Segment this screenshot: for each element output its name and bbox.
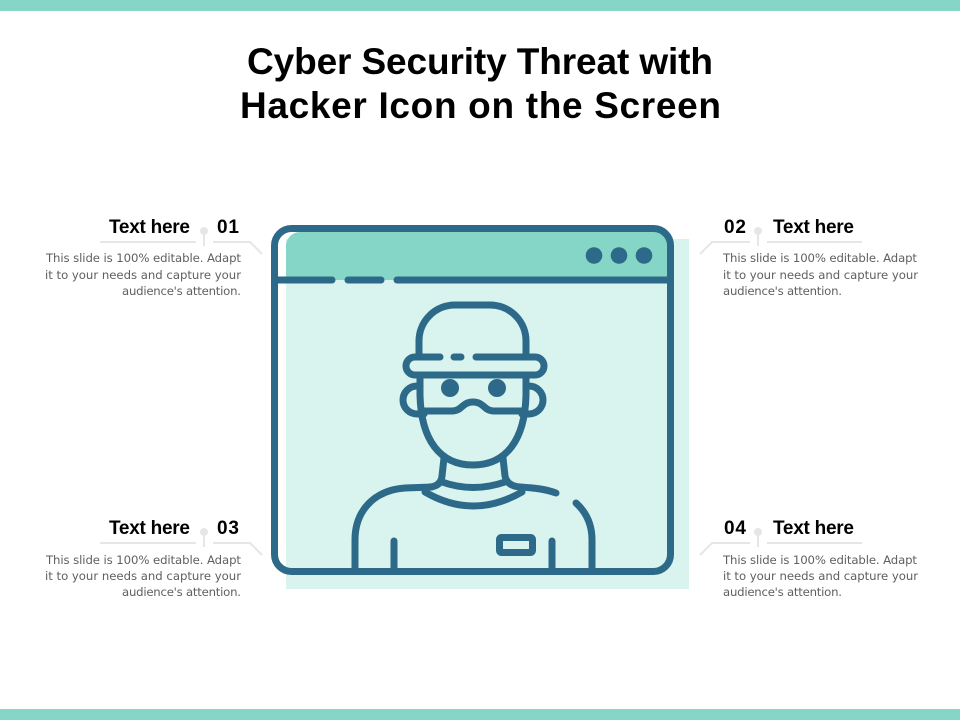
callout 03: audience's attention. — [122, 585, 241, 599]
callout 02: audience's attention. — [723, 284, 842, 298]
bottom bar — [0, 709, 960, 720]
callout 01: Text here — [109, 217, 190, 238]
callout 03: 03 — [217, 518, 239, 539]
icon: browser window with hacker — [274, 228, 670, 572]
window frame — [274, 228, 670, 572]
hacker figure — [355, 305, 592, 570]
callout 03: This slide is 100% editable. Adapt — [45, 553, 241, 567]
shoulders — [355, 487, 592, 570]
callout 04 — [700, 518, 918, 599]
callout 04: 04 — [724, 518, 746, 539]
callout 03: it to your needs and capture your — [45, 569, 241, 583]
title — [240, 41, 721, 126]
face — [420, 376, 526, 465]
goggles — [424, 402, 523, 411]
callout 01: This slide is 100% editable. Adapt — [45, 251, 241, 265]
callout 04: This slide is 100% editable. Adapt — [722, 553, 917, 567]
callout 01 — [45, 217, 262, 298]
neck — [430, 458, 520, 487]
callout 02: it to your needs and capture your — [723, 268, 918, 282]
arms — [394, 541, 552, 570]
title bar divider — [275, 276, 670, 284]
callout 03 — [45, 518, 262, 599]
title: Cyber Security Threat with — [247, 41, 713, 82]
eyes — [441, 379, 459, 397]
callout 04: Text here — [773, 518, 854, 539]
badge — [500, 538, 532, 552]
window title bar fill — [286, 232, 670, 280]
title: Hacker Icon on the Screen — [240, 85, 721, 126]
window backdrop — [286, 239, 689, 589]
hat brim — [406, 357, 544, 375]
callout 02: 02 — [724, 217, 746, 238]
callout 04: audience's attention. — [723, 585, 842, 599]
callout 04: it to your needs and capture your — [723, 569, 918, 583]
hat — [419, 305, 526, 355]
callout 01: it to your needs and capture your — [45, 268, 241, 282]
callout 01: audience's attention. — [122, 284, 241, 298]
collar — [425, 482, 522, 506]
callout 02: Text here — [773, 217, 854, 238]
callout 02 — [700, 217, 918, 298]
ears — [403, 386, 543, 414]
callout 02: This slide is 100% editable. Adapt — [722, 251, 917, 265]
top bar — [0, 0, 960, 11]
window dots — [586, 247, 652, 264]
callout 01: 01 — [217, 217, 239, 238]
callout 03: Text here — [109, 518, 190, 539]
